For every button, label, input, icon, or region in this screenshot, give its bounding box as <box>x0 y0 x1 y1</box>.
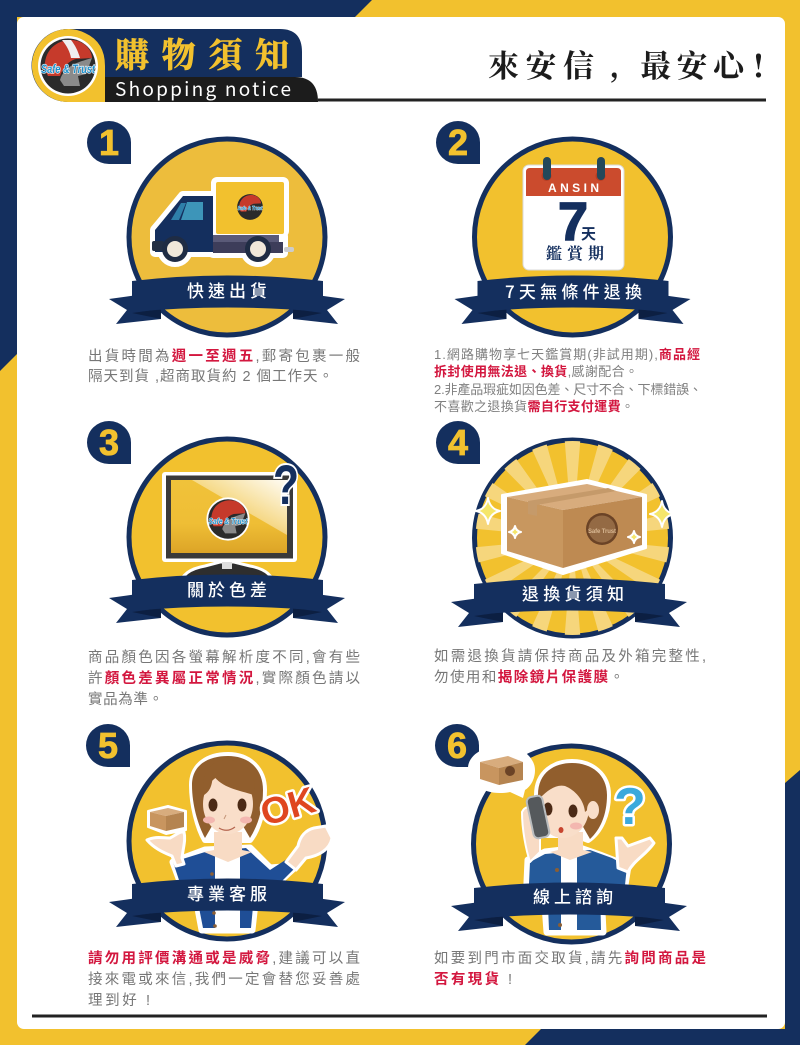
text 3: 實品為準。 <box>88 690 163 708</box>
header banner <box>32 28 766 102</box>
ribbon 6 <box>451 882 687 931</box>
badge 3: 3 <box>99 422 119 463</box>
icon: monitor <box>162 453 299 585</box>
text 3: 許顏色差異屬正常情況,實際顏色請以 <box>88 669 360 687</box>
ribbon label 4: 退換貨須知 <box>522 580 624 605</box>
hand holding phone <box>522 807 540 862</box>
speech bubble with box <box>468 745 535 798</box>
badge 3 <box>87 421 131 464</box>
panel 5: customer service <box>86 724 360 1009</box>
icon: truck <box>152 177 294 262</box>
text 4: 勿使用和揭除鏡片保護膜。 <box>434 668 624 686</box>
badge 1 <box>87 121 131 164</box>
panel 1: fast shipping <box>87 121 360 385</box>
circle 6 <box>474 746 670 942</box>
ribbon label 1: 快速出貨 <box>187 277 267 302</box>
icon: calendar: 7 <box>558 192 588 252</box>
text 4: 如需退換貨請保持商品及外箱完整性, <box>434 647 706 665</box>
badge 6: 6 <box>447 725 467 766</box>
logo badge yellow <box>32 29 105 102</box>
text 6: 否有現貨 ! <box>434 970 512 988</box>
panel 2: 7 day return <box>434 121 702 414</box>
badge 2: 2 <box>448 122 468 163</box>
text 4 <box>434 647 706 686</box>
sunburst rays <box>473 438 672 638</box>
truck logo: Safe & Trust <box>238 206 263 212</box>
text 2: 不喜歡之退換貨需自行支付運費。 <box>434 399 634 414</box>
slogan: 最安心 <box>640 41 748 86</box>
icon: calendar <box>523 157 624 270</box>
circle 1 <box>129 139 325 335</box>
text 1 <box>88 347 360 385</box>
text 6: 如要到門市面交取貨,請先詢問商品是 <box>434 949 706 967</box>
text 2: 1.網路購物享七天鑑賞期(非試用期),商品經 <box>434 347 700 362</box>
question mark: ? <box>273 453 299 516</box>
badge 4 <box>436 421 480 464</box>
circle 4 <box>474 440 670 636</box>
slogan: 來安信 <box>488 41 594 86</box>
ribbon 4 <box>451 578 687 627</box>
text 1: 出貨時間為週一至週五,郵寄包裹一般 <box>88 347 360 365</box>
icon: smiling agent <box>147 755 332 930</box>
text 5: 理到好 ! <box>88 992 150 1009</box>
text 2: 拆封使用無法退、換貨,感謝配合。 <box>434 364 638 379</box>
text 3: 商品顏色因各螢幕解析度不同,會有些 <box>88 648 360 666</box>
ribbon 3 <box>109 574 345 623</box>
badge 5 <box>86 724 130 767</box>
question mark: ? <box>614 778 646 836</box>
right hand <box>286 826 332 870</box>
ribbon label 2: 7天無條件退換 <box>505 278 642 303</box>
badge 4: 4 <box>448 422 468 463</box>
bottom line <box>32 1014 767 1018</box>
icon: calendar: ANSIN <box>548 181 599 195</box>
phone <box>526 795 550 839</box>
circle 2 <box>474 139 670 335</box>
panel 6: online inquiry <box>434 724 706 988</box>
left hand <box>147 832 185 866</box>
small box <box>148 806 186 834</box>
subtitle: Shopping notice <box>115 75 291 102</box>
slogan: ! <box>753 41 764 86</box>
text 2: 2.非產品瑕疵如因色差、尺寸不合、下標錯誤、 <box>434 382 702 397</box>
box logo: Safe Trust <box>588 529 616 535</box>
text 5: 接來電或來信,我們一定會替您妥善處 <box>88 971 360 988</box>
raised hand <box>616 838 654 872</box>
text 1: 隔天到貨 ,超商取貨約 2 個工作天。 <box>88 367 333 385</box>
helmet logo: Safe & Trust <box>41 64 96 76</box>
text 5 <box>88 949 360 1009</box>
panel 4: return notes <box>434 421 706 686</box>
text 6 <box>434 949 706 988</box>
logo badge background <box>32 29 302 102</box>
text 5: 請勿用評價溝通或是威脅,建議可以直 <box>88 949 360 967</box>
ribbon label 5: 專業客服 <box>187 880 267 905</box>
badge 6 <box>435 724 479 767</box>
icon: agent on phone <box>522 762 654 932</box>
ribbon 2 <box>454 276 690 324</box>
icon: calendar: 天 <box>581 226 596 243</box>
panel 3: color difference <box>87 421 360 708</box>
text 3 <box>88 648 360 708</box>
circle 3 <box>129 439 325 635</box>
text 2 <box>434 347 702 414</box>
circle 5 <box>129 743 325 939</box>
ribbon label 3: 關於色差 <box>187 576 267 601</box>
badge 2 <box>436 121 480 164</box>
subtitle bar <box>105 77 318 102</box>
OK sign: OK <box>256 779 320 834</box>
ribbon label 6: 線上諮詢 <box>533 883 613 908</box>
box logo <box>586 513 618 545</box>
slogan <box>488 41 764 86</box>
sparkles <box>476 498 674 543</box>
slogan: , <box>609 41 619 86</box>
title: 購物須知 <box>115 28 289 77</box>
badge 1: 1 <box>99 122 119 163</box>
helmet logo <box>38 36 98 96</box>
icon: calendar: 鑑賞期 <box>546 241 604 264</box>
truck logo <box>237 194 263 220</box>
ribbon 5 <box>109 878 345 927</box>
ribbon 1 <box>109 276 345 324</box>
badge 5: 5 <box>98 725 118 766</box>
monitor logo: Safe & Trust <box>209 517 248 526</box>
icon: cardboard box <box>476 480 674 574</box>
